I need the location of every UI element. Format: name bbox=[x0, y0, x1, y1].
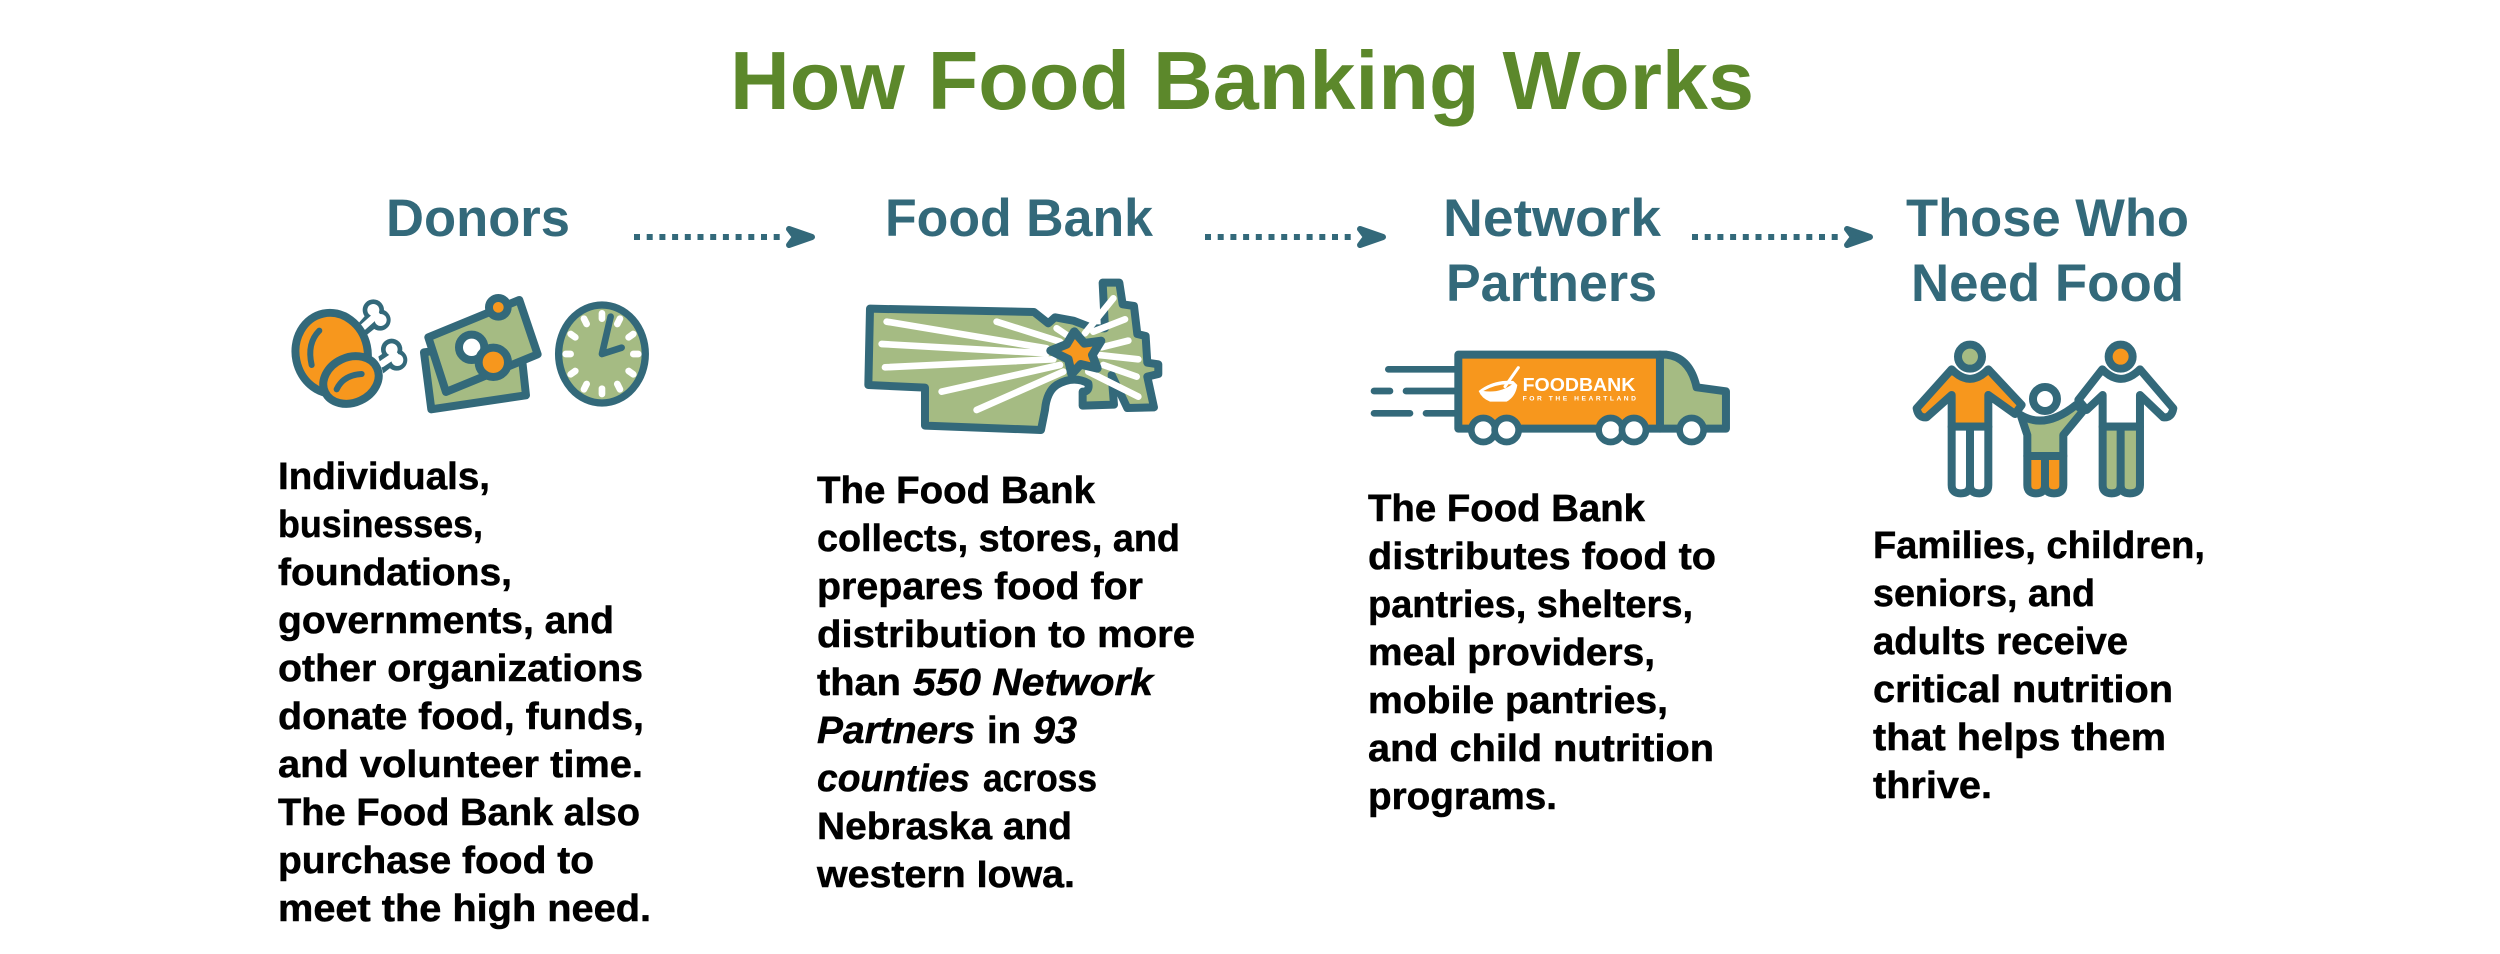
text block: network partners description: mobile pantries, bbox=[1368, 680, 1668, 722]
text block: food bank description: prepares food for bbox=[817, 566, 1143, 608]
icon: money bbox=[424, 298, 538, 409]
text block: those who need food description: thrive. bbox=[1873, 765, 1992, 807]
text block: those who need food description bbox=[1873, 525, 2205, 807]
text block: network partners description: The Food Bank bbox=[1368, 488, 1646, 530]
text block: food bank description: across bbox=[983, 758, 1097, 800]
text block: those who need food description: adults receive bbox=[1873, 621, 2128, 663]
heading: Those Who Need Food: Need Food bbox=[1911, 254, 2184, 313]
icon: delivery truck: FOODBANK bbox=[1523, 374, 1636, 395]
heading: Network Partners: Network bbox=[1443, 189, 1662, 248]
text block: food bank description: counties bbox=[817, 758, 970, 800]
text block: food bank description: distribution to more bbox=[817, 614, 1195, 656]
text block: food bank description: than bbox=[817, 662, 901, 704]
text block: those who need food description: seniors, and bbox=[1873, 573, 2095, 615]
arrow: food bank to network partners bbox=[1205, 229, 1383, 245]
heading: Food Bank: Food Bank bbox=[885, 189, 1154, 248]
text block: donors description: meet the high need. bbox=[278, 888, 651, 930]
text block: food bank description: Partners bbox=[817, 710, 975, 752]
text block: those who need food description: that helps them bbox=[1873, 717, 2166, 759]
text block: donors description: purchase food to bbox=[278, 840, 594, 882]
text block: food bank description bbox=[816, 470, 1195, 896]
heading: Those Who Need Food bbox=[1906, 189, 2189, 313]
text block: food bank description: in bbox=[987, 710, 1021, 752]
text block: donors description: Individuals, bbox=[278, 456, 490, 498]
text block: food bank description: The Food Bank bbox=[817, 470, 1096, 512]
icon: chicken bbox=[288, 299, 407, 413]
text block: donors description: foundations, bbox=[278, 552, 512, 594]
text block: food bank description: collects, stores, and bbox=[817, 518, 1180, 560]
text block: food bank description: 93 bbox=[1033, 710, 1077, 752]
text block: food bank description: Nebraska and bbox=[817, 806, 1072, 848]
arrow: network partners to those who need food bbox=[1692, 229, 1870, 245]
text block: network partners description: meal providers, bbox=[1368, 632, 1655, 674]
text block: those who need food description: Families, children, bbox=[1873, 525, 2205, 567]
text block: donors description: The Food Bank also bbox=[278, 792, 640, 834]
heading: Donors: Donors bbox=[386, 189, 570, 248]
text block: network partners description: pantries, shelters, bbox=[1368, 584, 1693, 626]
text block: donors description: other organizations bbox=[278, 648, 643, 690]
heading: Network Partners: Partners bbox=[1446, 254, 1657, 313]
icon: delivery truck bbox=[1374, 355, 1726, 442]
heading: Those Who Need Food: Those Who bbox=[1906, 189, 2189, 248]
text block: those who need food description: critical nutrition bbox=[1873, 669, 2173, 711]
text block: donors description: businesses, bbox=[278, 504, 483, 546]
icon: Nebraska and Iowa map with star bbox=[868, 283, 1158, 430]
text block: network partners description bbox=[1368, 488, 1716, 818]
heading: Network Partners bbox=[1443, 189, 1662, 313]
icon: clock bbox=[559, 305, 645, 403]
icon: delivery truck: FOR THE HEARTLAND bbox=[1523, 396, 1636, 403]
text block: food bank description: 550 Network bbox=[913, 662, 1155, 704]
text block: donors description: and volunteer time. bbox=[278, 744, 643, 786]
text block: network partners description: and child nutrition bbox=[1368, 728, 1714, 770]
text block: network partners description: distributes food to bbox=[1368, 536, 1716, 578]
arrow: donors to food bank bbox=[634, 229, 812, 245]
title: How Food Banking Works bbox=[730, 34, 1754, 127]
text block: donors description: donate food, funds, bbox=[278, 696, 644, 738]
text block: donors description bbox=[278, 456, 651, 930]
text block: food bank description: western Iowa. bbox=[816, 854, 1075, 896]
icon: family holding hands bbox=[1917, 345, 2173, 493]
text block: donors description: governments, and bbox=[278, 600, 614, 642]
text block: network partners description: programs. bbox=[1368, 776, 1557, 818]
